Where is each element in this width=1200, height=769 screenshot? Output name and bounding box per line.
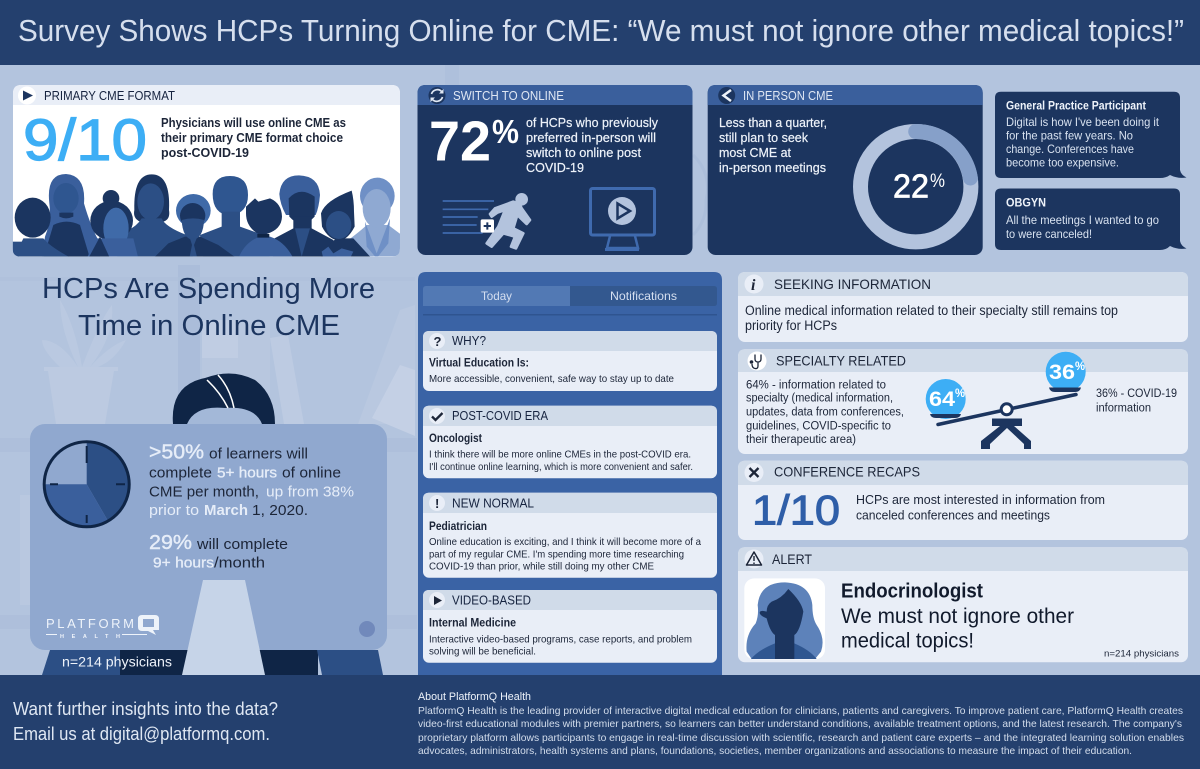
text: less than a quarter: Less than a quarter,	[719, 115, 827, 130]
card: conference recaps: HCPs are most interested in information from	[856, 493, 1105, 507]
speech bubble: OBGYN: All the meetings I wanted to go	[1006, 213, 1159, 227]
card: why	[423, 331, 717, 391]
speech bubble: general practice participant: change. Conferences have	[1006, 142, 1134, 156]
crowd of physicians	[13, 174, 402, 258]
background office scene	[0, 65, 708, 629]
text: 29 percent: 29%	[149, 532, 192, 554]
call to action: Email us at digital@platformq.com.	[13, 724, 270, 744]
title banner	[0, 0, 1200, 65]
text: less than a quarter: most CME at	[719, 145, 791, 160]
text: 29 percent: /month	[214, 555, 265, 572]
icon: close	[744, 463, 764, 482]
card: video-based: Interactive video-based programs, case reports, and problem	[429, 634, 692, 646]
logo: PlatformQ Health: HEALTH	[60, 634, 120, 640]
text: more than 50 percent of learners: >50%	[149, 441, 204, 463]
speech bubble: OBGYN: OBGYN	[1006, 196, 1046, 210]
heading: HCPs spending more time: Time in Online CME	[78, 310, 340, 342]
speech bubble: general practice participant: General Practice Participant	[1006, 98, 1146, 112]
card: conference recaps: CONFERENCE RECAPS	[774, 464, 920, 480]
card: why: WHY?	[452, 333, 486, 348]
card: video-based	[423, 590, 717, 663]
seesaw chart: 64 vs 36	[926, 352, 1086, 449]
panel: switch to online: 72	[429, 110, 491, 174]
text: 64 percent description: 64% - information related to	[746, 379, 886, 391]
text: 29 percent: will complete	[196, 536, 288, 553]
about PlatformQ Health	[418, 691, 1184, 757]
card: conference recaps: 1/10	[752, 486, 840, 533]
donut chart: 22 percent: %	[930, 171, 945, 192]
text: 64 percent description: updates, data from conferences,	[746, 407, 904, 419]
seesaw chart: 64 vs 36: 36	[1049, 361, 1075, 384]
panel: primary CME format: 9/10	[23, 108, 147, 173]
card: conference recaps: canceled conferences and meetings	[856, 508, 1050, 522]
card: post-COVID era	[423, 406, 717, 478]
donut chart: 22 percent	[860, 131, 971, 242]
card: new normal: !	[435, 496, 439, 511]
text: 64 percent description	[746, 379, 904, 446]
card: seeking information: i	[751, 277, 756, 294]
footer banner	[0, 675, 1200, 769]
card: alert: ALERT	[772, 551, 812, 567]
seesaw chart: 64 vs 36: %	[1075, 359, 1085, 373]
card: new normal: COVID-19 than prior, while still doing my other CME	[429, 560, 654, 572]
logo: PlatformQ Health: PLATFORM	[46, 616, 134, 631]
panel: switch to online: %	[492, 113, 519, 150]
about PlatformQ Health: proprietary platform allows participants to engage in real-time discussion with scientific, research and patient care experts – and the integrated learning solution enables	[418, 732, 1184, 744]
card: post-COVID era: POST-COVID ERA	[452, 408, 548, 423]
card: post-COVID era: I think there will be more online CMEs in the post-COVID era.	[429, 449, 691, 461]
heading: HCPs spending more time: HCPs Are Spending More	[42, 273, 375, 305]
tabs	[423, 286, 717, 316]
icon: refresh	[428, 87, 446, 104]
text: 64 percent description: their therapeutic area)	[746, 434, 856, 446]
text: more than 50 percent of learners: prior to	[149, 502, 199, 519]
card: video-based: solving will be beneficial.	[429, 645, 536, 657]
card: alert: medical topics!	[841, 629, 974, 653]
card: video-based: VIDEO-BASED	[452, 592, 531, 607]
portrait: endocrinologist	[744, 578, 825, 659]
tabs: Notifications	[610, 289, 677, 303]
card: conference recaps	[738, 461, 1188, 540]
about PlatformQ Health: PlatformQ Health is the leading provider of interactive digital medical education for clinicians, patients and caregivers. To improve patient care, PlatformQ Health creates	[418, 705, 1183, 717]
text: more than 50 percent of learners: of learners will	[209, 445, 308, 462]
call to action	[13, 699, 278, 744]
card: new normal: Pediatrician	[429, 519, 487, 533]
icon: video monitor	[590, 188, 654, 251]
about PlatformQ Health: advocates, administrators, health systems and plans, foundations, societies, member organizations and associations to measure the impact of their education.	[418, 745, 1132, 757]
card: alert: n=214 physicians	[1104, 649, 1179, 660]
text: more than 50 percent of learners: CME per month,	[149, 483, 259, 500]
card: post-COVID era: Oncologist	[429, 431, 482, 445]
card: seeking information: priority for HCPs	[745, 318, 837, 333]
text: less than a quarter: in-person meetings	[719, 160, 826, 175]
text: 36 percent description: 36% - COVID-19	[1096, 388, 1177, 400]
panel: switch to online: SWITCH TO ONLINE	[453, 88, 564, 103]
icon: clock chart	[44, 442, 129, 527]
text: physicians: their primary CME format choice	[161, 130, 343, 145]
speech bubble: general practice participant: for the past few years. No	[1006, 128, 1133, 142]
icon: stethoscope	[748, 352, 766, 370]
icon: back arrow	[718, 87, 735, 104]
card: alert: We must not ignore other	[841, 604, 1074, 628]
card: video-based: Internal Medicine	[429, 616, 516, 630]
text: 72 percent description: of HCPs who previously	[526, 115, 658, 130]
seesaw chart: 64 vs 36: %	[955, 386, 965, 400]
card: post-COVID era: I'll continue online learning, which is more convenient and safer.	[429, 461, 693, 473]
text: 64 percent description: specialty (medical information,	[746, 393, 893, 405]
speech bubble: general practice participant: become too expensive.	[1006, 156, 1119, 170]
card: new normal	[423, 493, 717, 578]
text: 29 percent	[149, 532, 288, 572]
panel: primary CME format: PRIMARY CME FORMAT	[44, 88, 175, 103]
panel: in person CME: IN PERSON CME	[743, 88, 833, 103]
text: physicians: Physicians will use online CME as	[161, 115, 346, 130]
donut chart: 22 percent: 22	[893, 168, 929, 205]
about PlatformQ Health: video-first educational modules with premier partners, so learners can better understand conditions, available treatment options, and the latest research. The company's	[418, 718, 1182, 730]
text: less than a quarter: still plan to seek	[719, 130, 808, 145]
speech bubble: general practice participant	[995, 92, 1186, 178]
tabs: Today	[481, 289, 512, 303]
card: new normal: NEW NORMAL	[452, 496, 534, 511]
card: specialty related	[738, 349, 1188, 454]
speech bubble: OBGYN	[995, 188, 1186, 250]
text: more than 50 percent of learners: March	[204, 502, 248, 519]
icon: running doctor	[443, 193, 530, 248]
card: specialty related: SPECIALTY RELATED	[776, 353, 906, 369]
text: physicians	[161, 115, 346, 160]
text: 36 percent description	[1096, 388, 1177, 415]
text: 29 percent: 9+ hours	[153, 555, 214, 572]
sample size note: n=214 physicians	[62, 654, 172, 670]
panel: switch to online	[418, 85, 692, 255]
text: 36 percent description: information	[1096, 403, 1151, 415]
card: alert: Endocrinologist	[841, 581, 983, 603]
card: why: ?	[434, 334, 442, 349]
seesaw chart: 64 vs 36: 64	[929, 388, 955, 411]
panel: primary CME format	[13, 85, 402, 258]
card: seeking information: Online medical information related to their specialty still remains top	[745, 303, 1118, 318]
about PlatformQ Health: About PlatformQ Health	[418, 691, 531, 703]
icon: play	[18, 86, 36, 104]
text: more than 50 percent of learners	[149, 441, 354, 519]
text: less than a quarter	[719, 115, 827, 175]
speech bubble: OBGYN: to were canceled!	[1006, 227, 1092, 241]
card: seeking information: SEEKING INFORMATION	[774, 276, 931, 292]
card: new normal: Online education is exciting, and I think it will become more of a	[429, 536, 701, 548]
panel: in person CME	[708, 85, 983, 255]
text: more than 50 percent of learners: 5+ hours	[217, 465, 277, 482]
text: 72 percent description: switch to online post	[526, 145, 641, 160]
text: more than 50 percent of learners: of online	[282, 465, 341, 482]
card: seeking information	[738, 272, 1188, 342]
heading: HCPs spending more time	[42, 273, 375, 342]
text: more than 50 percent of learners: 1, 2020.	[252, 502, 308, 519]
panel: phone notifications	[418, 272, 722, 675]
card: new normal: part of my regular CME. I'm spending more time researching	[429, 548, 684, 560]
card: why: Virtual Education Is:	[429, 356, 529, 370]
text: more than 50 percent of learners: complete	[149, 465, 212, 482]
text: 64 percent description: guidelines, COVID-specific to	[746, 420, 891, 432]
text: 72 percent description: preferred in-person will	[526, 130, 656, 145]
logo: PlatformQ Health	[46, 615, 159, 640]
text: 72 percent description	[526, 115, 658, 175]
call to action: Want further insights into the data?	[13, 699, 278, 719]
card: why: More accessible, convenient, safe way to stay up to date	[429, 373, 674, 385]
text: 72 percent description: COVID-19	[526, 160, 584, 175]
speech bubble: general practice participant: Digital is how I've been doing it	[1006, 115, 1160, 129]
card: alert	[738, 547, 1188, 662]
icon: warning	[744, 550, 764, 568]
illustration: person behind monitor	[30, 373, 387, 675]
text: physicians: post-COVID-19	[161, 145, 249, 160]
text: more than 50 percent of learners: up from 38%	[266, 483, 354, 500]
